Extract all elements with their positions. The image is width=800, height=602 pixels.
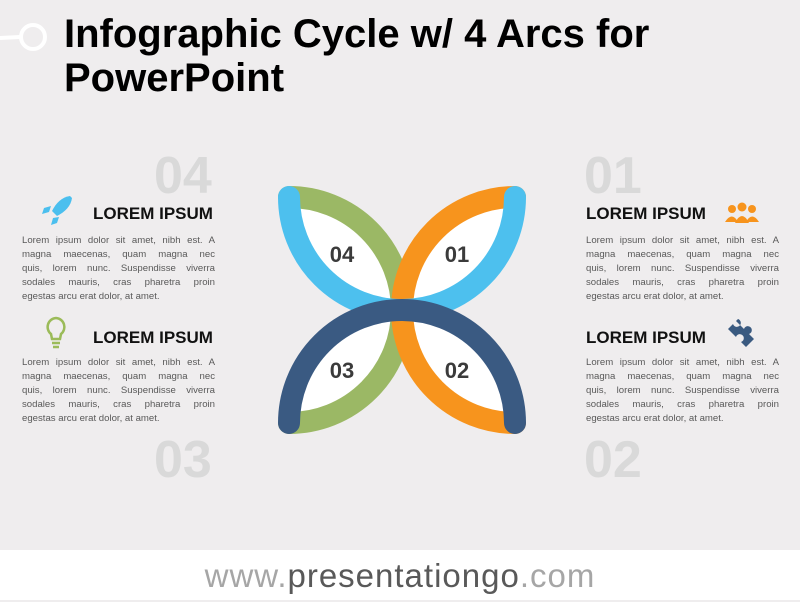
number 02: 02: [584, 431, 642, 489]
icon: puzzle: [728, 319, 754, 347]
heading: LOREM IPSUM: [586, 204, 706, 223]
text: [22, 235, 215, 302]
text: egestas arcu erat dolor, at amet.: [22, 291, 160, 302]
heading: LOREM IPSUM: [93, 328, 213, 347]
text: egestas arcu erat dolor, at amet.: [586, 413, 724, 424]
text: quis, lorem nunc. Suspendisse viverra: [22, 263, 215, 274]
text: magna maecenas, quam magna nec: [586, 371, 779, 382]
footer: www.presentationgo.com: [205, 557, 595, 594]
petal numbers: 01: [445, 242, 469, 267]
text: magna maecenas, quam magna nec: [586, 249, 779, 260]
number 03: 03: [154, 431, 212, 489]
text: quis, lorem nunc. Suspendisse viverra: [22, 385, 215, 396]
heading: LOREM IPSUM: [586, 328, 706, 347]
icon: rocket: [42, 196, 72, 225]
petal numbers: [330, 242, 469, 383]
text: sodales mauris, cras pharetra proin: [22, 277, 215, 288]
title icon: [0, 23, 47, 51]
petal numbers: 02: [445, 358, 469, 383]
petals: [289, 197, 515, 423]
icon: lightbulb: [46, 316, 66, 348]
panel: 01: [584, 147, 779, 302]
text: sodales mauris, cras pharetra proin: [586, 277, 779, 288]
text: sodales mauris, cras pharetra proin: [586, 399, 779, 410]
text: egestas arcu erat dolor, at amet.: [22, 413, 160, 424]
text: [586, 235, 779, 302]
number 04: 04: [154, 147, 212, 205]
text: quis, lorem nunc. Suspendisse viverra: [586, 385, 779, 396]
text: sodales mauris, cras pharetra proin: [22, 399, 215, 410]
panel: 03: [22, 316, 215, 489]
text: Lorem ipsum dolor sit amet, nibh est. A: [22, 235, 215, 246]
title: PowerPoint: [64, 56, 284, 100]
panel: 02: [584, 319, 779, 489]
text: magna maecenas, quam magna nec: [22, 371, 215, 382]
text: magna maecenas, quam magna nec: [22, 249, 215, 260]
title: Infographic Cycle w/ 4 Arcs for: [64, 12, 649, 56]
text: Lorem ipsum dolor sit amet, nibh est. A: [586, 357, 779, 368]
footer: [0, 550, 800, 600]
text: [586, 357, 779, 424]
title: [64, 12, 649, 100]
text: quis, lorem nunc. Suspendisse viverra: [586, 263, 779, 274]
petal numbers: 03: [330, 358, 354, 383]
heading: LOREM IPSUM: [93, 204, 213, 223]
panel: 04: [22, 147, 215, 302]
text: egestas arcu erat dolor, at amet.: [586, 291, 724, 302]
icon: people: [725, 202, 759, 223]
text: Lorem ipsum dolor sit amet, nibh est. A: [22, 357, 215, 368]
petal numbers: 04: [330, 242, 355, 267]
text: Lorem ipsum dolor sit amet, nibh est. A: [586, 235, 779, 246]
arcs: [289, 197, 515, 423]
number 01: 01: [584, 147, 642, 205]
text: [22, 357, 215, 424]
